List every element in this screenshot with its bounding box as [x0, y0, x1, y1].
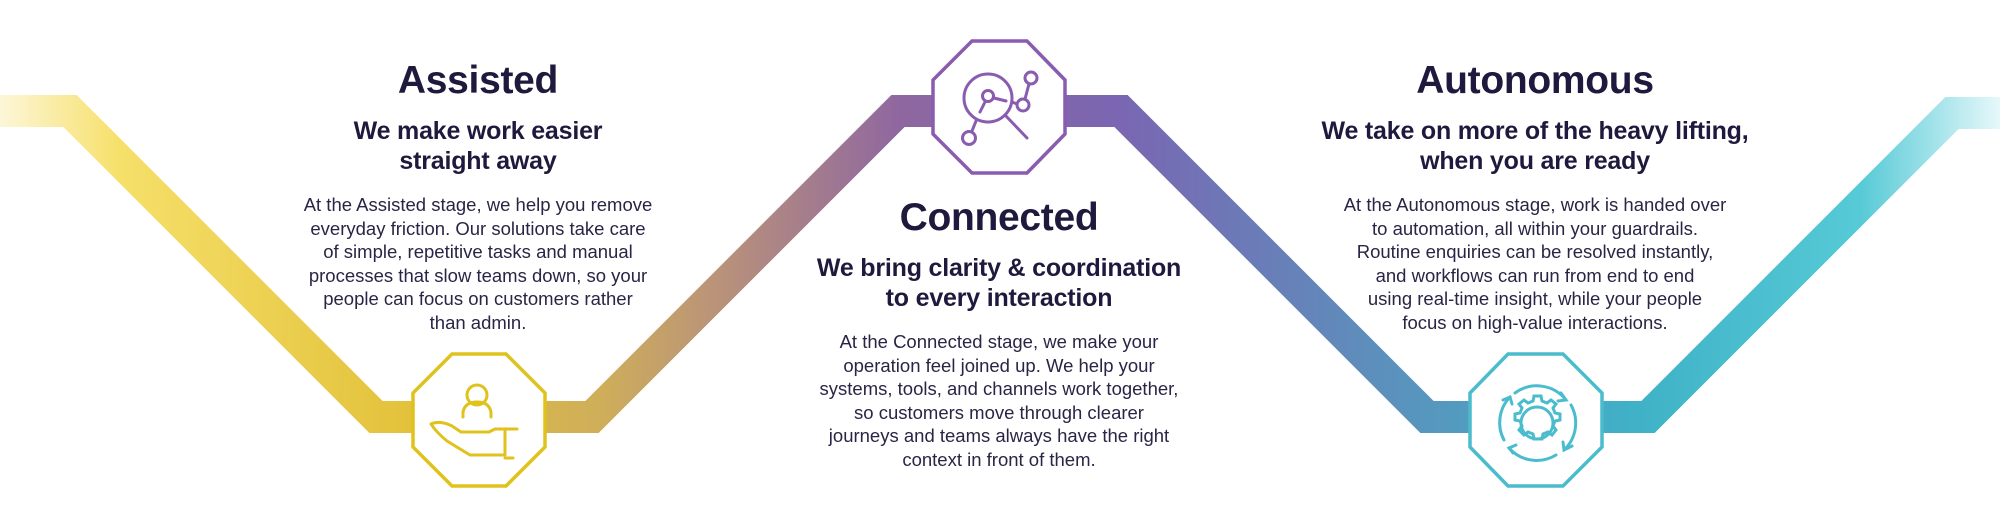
subheading: We bring clarity & coordination — [817, 254, 1181, 282]
body text: systems, tools, and channels work together, — [820, 378, 1178, 399]
body text: focus on high-value interactions. — [1402, 312, 1668, 332]
icon: autonomous (gear with cycle arrows) — [1470, 354, 1602, 486]
body text: At the Assisted stage, we help you remove — [304, 194, 652, 215]
body text: and workflows can run from end to end — [1376, 264, 1694, 286]
heading: Autonomous: Autonomous — [1416, 59, 1654, 102]
body text — [1344, 194, 1726, 333]
body text: journeys and teams always have the right — [829, 425, 1169, 446]
subheading — [816, 254, 1181, 312]
body text: so customers move through clearer — [854, 402, 1144, 422]
icon: assisted (hand with person) — [413, 354, 545, 486]
body text: of simple, repetitive tasks and manual — [323, 241, 633, 262]
subheading: to every interaction — [886, 284, 1112, 312]
text: Autonomous — [1322, 59, 1748, 333]
body text: At the Autonomous stage, work is handed over — [1344, 194, 1726, 215]
subheading: We make work easier — [354, 117, 602, 145]
body text — [820, 331, 1178, 470]
subheading: We take on more of the heavy lifting, — [1322, 117, 1748, 145]
body text — [304, 194, 652, 332]
subheading — [354, 117, 602, 175]
text: Connected — [816, 196, 1181, 470]
body text: people can focus on customers rather — [323, 288, 633, 309]
body text: everyday friction. Our solutions take care — [310, 218, 646, 238]
text: Assisted — [304, 59, 652, 332]
body text: to automation, all within your guardrails. — [1372, 218, 1698, 238]
body text: operation feel joined up. We help your — [843, 354, 1155, 376]
body text: than admin. — [430, 312, 526, 332]
heading: Assisted: Assisted — [398, 59, 558, 102]
subheading — [1322, 117, 1748, 175]
icon: connected (magnifier with nodes) — [933, 41, 1065, 173]
subheading: when you are ready — [1420, 147, 1650, 175]
body text: Routine enquiries can be resolved instantly, — [1357, 241, 1713, 262]
body text: context in front of them. — [902, 448, 1096, 470]
body text: using real-time insight, while your people — [1368, 288, 1702, 309]
body text: At the Connected stage, we make your — [840, 331, 1158, 352]
subheading: straight away — [399, 147, 557, 175]
body text: processes that slow teams down, so your — [309, 264, 647, 286]
heading: Connected: Connected — [900, 196, 1098, 239]
